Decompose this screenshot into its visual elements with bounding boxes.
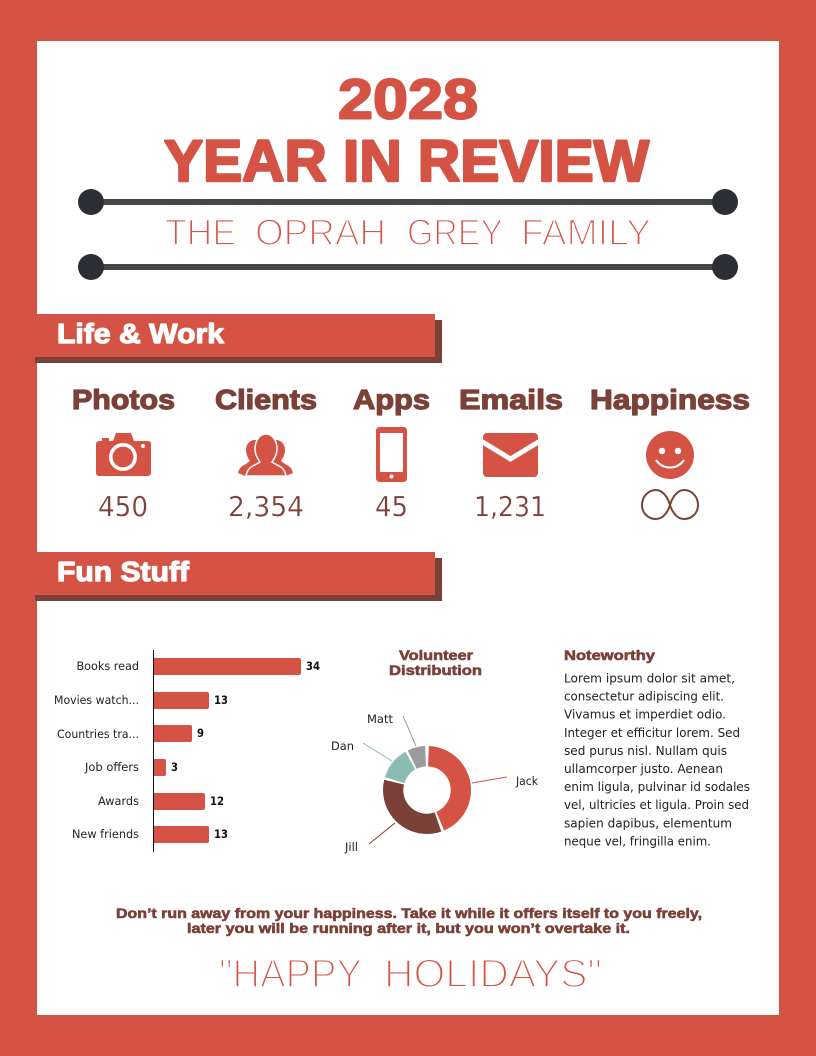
closing greeting <box>219 952 602 996</box>
stats row <box>72 384 750 523</box>
closing greeting: "HAPPY <box>219 952 362 996</box>
section banner: life and work <box>35 314 442 363</box>
donut labels <box>331 712 538 854</box>
noteworthy paragraph: vel, ultricies et ligula. Proin sed <box>564 797 749 812</box>
subtitle: family name: GREY <box>407 212 503 253</box>
stat: apps: Apps <box>353 384 430 415</box>
stat: photos <box>72 384 175 523</box>
bar chart labels: New friends <box>72 827 139 841</box>
stat: photos: 450 <box>98 490 148 523</box>
subtitle: family name <box>165 212 651 253</box>
stat: photos: Photos <box>72 384 175 415</box>
noteworthy paragraph: ullamcorper justo. Aenean <box>564 761 723 776</box>
donut title: Volunteer <box>399 647 474 663</box>
bar values: 13 <box>214 693 228 707</box>
bar chart labels: Movies watch... <box>54 693 139 707</box>
donut title: Distribution <box>389 662 482 678</box>
bar values: 9 <box>197 726 204 740</box>
donut slices <box>393 756 461 824</box>
noteworthy paragraph: neque vel, fringilla enim. <box>564 833 711 848</box>
donut labels: Jill <box>344 840 358 854</box>
noteworthy paragraph: sed purus nisl. Nullam quis <box>564 743 727 758</box>
bar chart labels <box>54 659 139 841</box>
stat: apps <box>353 384 430 523</box>
noteworthy paragraph: sapien dapibus, elementum <box>564 815 732 830</box>
footer quote: Don’t run away from your happiness. Take it while it offers itself to you freely, <box>116 905 702 921</box>
bar chart <box>54 650 320 852</box>
noteworthy paragraph: enim ligula, pulvinar id sodales <box>564 779 750 794</box>
stat: emails: Emails <box>459 384 563 415</box>
stat: happiness <box>590 384 750 519</box>
title block <box>78 68 738 280</box>
footer quote: later you will be running after it, but you won’t overtake it. <box>187 920 630 936</box>
bottom divider with end dots <box>78 254 738 280</box>
bars <box>150 658 301 843</box>
donut title <box>389 647 482 678</box>
noteworthy paragraph: Lorem ipsum dolor sit amet, <box>564 670 735 686</box>
noteworthy paragraph <box>564 670 750 848</box>
section banner: life and work: Life & Work <box>57 318 224 349</box>
bar values: 3 <box>171 760 178 774</box>
noteworthy paragraph: Integer et efficitur lorem. Sed <box>564 725 740 740</box>
stat: emails: 1,231 <box>474 490 546 523</box>
closing greeting: HOLIDAYS" <box>384 952 602 996</box>
donut leader lines <box>363 716 507 844</box>
heading: year in review: YEAR IN REVIEW <box>164 129 649 194</box>
subtitle: family name: THE <box>165 212 236 253</box>
stat: apps: 45 <box>375 490 408 523</box>
subtitle: family name: FAMILY <box>521 212 651 253</box>
bar values: 12 <box>210 794 224 808</box>
section banner: fun stuff <box>35 552 442 601</box>
donut labels: Matt <box>367 712 393 726</box>
bar values: 34 <box>306 659 320 673</box>
bar chart labels: Awards <box>98 794 139 808</box>
donut labels: Dan <box>331 739 354 753</box>
white mask left of axis <box>145 650 153 852</box>
noteworthy paragraph: Vivamus et imperdiet odio. <box>564 707 726 722</box>
stat: clients <box>215 384 317 523</box>
bar chart labels: Countries tra... <box>57 727 139 741</box>
stat: emails <box>459 384 563 523</box>
donut labels: Jack <box>515 774 538 788</box>
noteworthy paragraph: consectetur adipiscing elit. <box>564 689 724 704</box>
bar chart axis <box>153 650 154 852</box>
bar values <box>171 659 320 841</box>
stat: happiness: Happiness <box>590 384 750 415</box>
bar values: 13 <box>214 827 228 841</box>
bar chart labels: Job offers <box>84 760 139 774</box>
footer quote <box>116 905 702 936</box>
noteworthy heading: Noteworthy <box>564 647 655 663</box>
bar chart labels: Books read <box>76 659 139 673</box>
noteworthy text block <box>564 647 750 848</box>
top divider with end dots <box>78 189 738 215</box>
subtitle: family name: OPRAH <box>255 212 386 253</box>
donut chart: volunteer distribution <box>331 647 538 854</box>
stat: clients: 2,354 <box>228 490 304 523</box>
section banner: fun stuff: Fun Stuff <box>57 556 190 587</box>
stat: clients: Clients <box>215 384 317 415</box>
heading: year: 2028 <box>338 68 478 132</box>
